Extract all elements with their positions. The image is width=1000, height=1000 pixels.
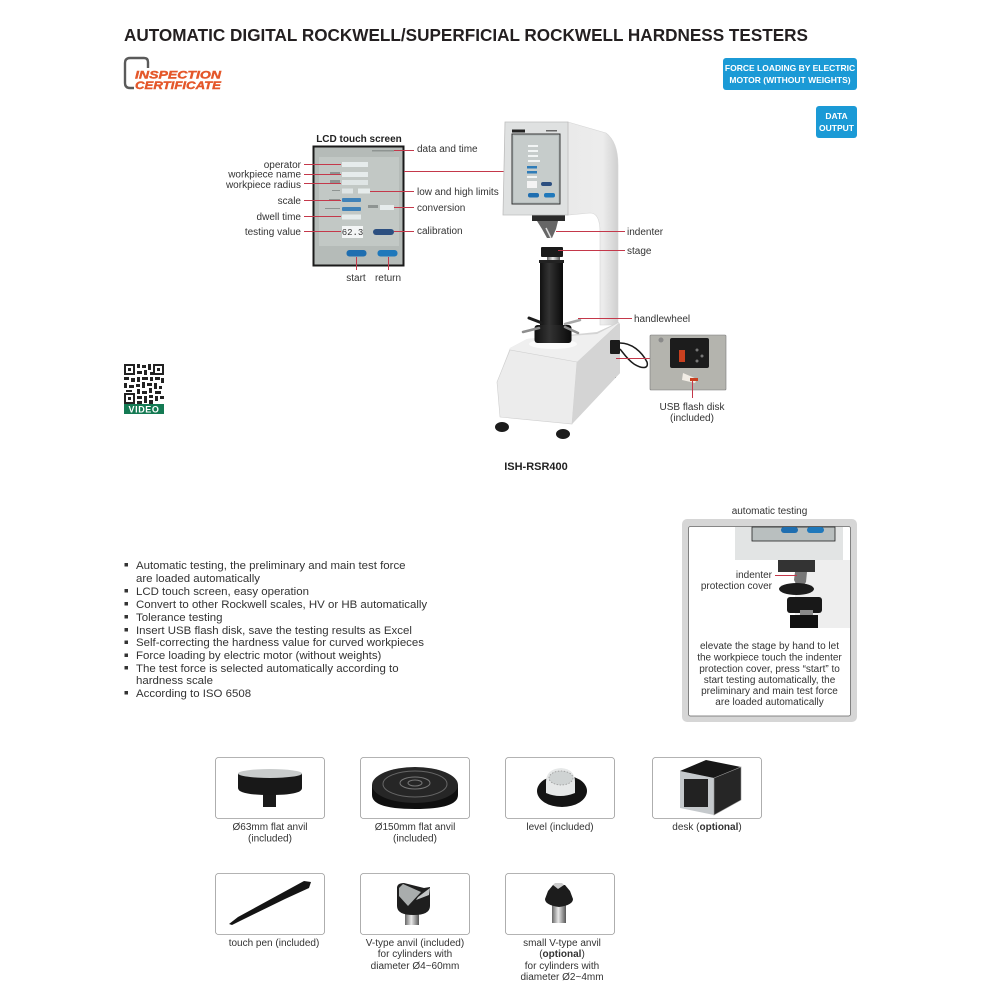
callouts: LCD labels left [225, 160, 341, 238]
callouts: LCD labels left: testing value [245, 227, 301, 238]
feature list: LCD touch screen, easy operation [136, 586, 309, 598]
callouts: LCD labels right: data and time [417, 144, 478, 155]
callout: indenter protection cover: protection cover [701, 581, 773, 592]
accessory: desk [652, 758, 762, 833]
badge: data output [816, 106, 857, 138]
feature list [124, 560, 427, 700]
machine: hardness tester [495, 122, 647, 439]
icon: pen [229, 881, 311, 925]
callouts: LCD labels left: workpiece name [227, 170, 301, 180]
accessory: 150mm flat anvil: (included) [393, 834, 437, 844]
callouts: machine parts: handlewheel [634, 314, 690, 325]
feature list: Self-correcting the hardness value for curved workpieces [136, 637, 424, 649]
accessory: small V-type anvil: diameter Ø2~4mm [520, 972, 604, 983]
inset: USB flash disk [650, 335, 726, 398]
callout: indenter protection cover [701, 570, 797, 592]
accessory: 63mm flat anvil: (included) [248, 834, 292, 844]
text: procedure: are loaded automatically [715, 697, 824, 708]
text: procedure: elevate the stage by hand to let [700, 641, 839, 652]
badge: data output: OUTPUT [819, 123, 855, 133]
feature list: Insert USB flash disk, save the testing results as Excel [136, 625, 412, 637]
badge: force loading: FORCE LOADING BY ELECTRIC [725, 63, 855, 73]
accessory: V-type anvil: for cylinders with [378, 949, 452, 960]
accessory: small V-type anvil [506, 874, 614, 983]
accessory: 150mm flat anvil: Ø150mm flat anvil [375, 822, 455, 833]
panel: automatic testing [682, 506, 857, 722]
photo: indenter detail [735, 527, 850, 628]
base [497, 322, 620, 424]
text: procedure: preliminary and main test force [701, 686, 838, 697]
handlewheel [523, 318, 580, 333]
accessory: level: level (included) [526, 822, 594, 833]
callouts: start and return [346, 257, 401, 284]
callouts: machine parts: indenter [627, 227, 664, 238]
icon: level [537, 768, 587, 807]
callouts: LCD labels left: scale [278, 196, 301, 207]
feature list: are loaded automatically [136, 573, 260, 585]
head panel [503, 122, 568, 215]
accessory: 63mm flat anvil: Ø63mm flat anvil [232, 822, 308, 833]
callouts: start and return: return [375, 273, 401, 284]
heading: LCD touch screen: LCD touch screen [316, 134, 402, 145]
callouts: LCD labels right: calibration [417, 226, 463, 237]
badge: force loading: MOTOR (WITHOUT WEIGHTS) [729, 75, 851, 85]
column body [568, 122, 618, 325]
feature list: Tolerance testing [136, 612, 222, 624]
callouts: LCD labels right: conversion [417, 203, 465, 214]
accessory: level [506, 758, 614, 833]
icon: V anvil [397, 883, 430, 925]
accessory: small V-type anvil: small V-type anvil [523, 938, 601, 949]
accessory: V-type anvil [360, 874, 470, 972]
accessory: desk: desk (optional) [672, 822, 742, 833]
icon: inspection certificate logo: INSPECTION [135, 70, 222, 82]
screen frame [314, 146, 404, 266]
column shaft [534, 255, 572, 343]
callouts: LCD labels right: low and high limits [417, 187, 499, 198]
model name: ISH-RSR400 [504, 461, 568, 473]
panel frame [682, 519, 857, 722]
callouts: machine parts: stage [627, 246, 652, 257]
callouts: LCD labels right [370, 144, 516, 237]
feature list: Convert to other Rockwell scales, HV or HB automatically [136, 599, 427, 611]
feature list: hardness scale [136, 675, 213, 687]
feature list: Force loading by electric motor (without weights) [136, 650, 382, 662]
feet [495, 372, 616, 439]
feature list: According to ISO 6508 [136, 688, 251, 700]
accessory: touch pen: touch pen (included) [229, 938, 319, 949]
callouts: LCD labels left: workpiece radius [225, 180, 301, 191]
callouts: machine parts [556, 227, 690, 358]
text: procedure: start testing automatically, the [704, 675, 836, 686]
indenter [532, 215, 565, 238]
caption: USB flash disk [659, 402, 726, 424]
panel: LCD touch screen [314, 134, 404, 266]
accessory: small V-type anvil: (optional) [539, 949, 585, 960]
accessory: small V-type anvil: for cylinders with [525, 961, 599, 972]
accessory: 150mm flat anvil [360, 758, 470, 844]
icon: inspection certificate logo: CERTIFICATE [135, 80, 222, 92]
accessory: V-type anvil: V-type anvil (included) [366, 938, 464, 949]
feature list: The test force is selected automatically according to [136, 663, 399, 675]
icon: QR code video: VIDEO [128, 404, 160, 414]
power cable [610, 340, 647, 368]
accessory: V-type anvil: diameter Ø4~60mm [371, 961, 459, 972]
icon: QR code video [124, 364, 164, 414]
callout: indenter protection cover: indenter [736, 570, 773, 581]
icon: round anvil [372, 767, 458, 809]
icon: inspection certificate logo [125, 58, 222, 92]
heading: automatic testing: automatic testing [732, 506, 807, 517]
icon: flat anvil [238, 769, 302, 807]
callouts: start and return: start [346, 273, 366, 284]
testing value: 62.3 [342, 228, 363, 238]
accessory: 63mm flat anvil [216, 758, 324, 844]
accessory: touch pen [216, 874, 324, 949]
text: procedure: protection cover, press “start” to [699, 664, 840, 675]
text: procedure: the workpiece touch the indenter [697, 652, 842, 664]
badge: force loading [723, 58, 857, 90]
badge: data output: DATA [825, 111, 848, 121]
text: procedure [697, 641, 842, 708]
feature list: Automatic testing, the preliminary and main test force [136, 560, 406, 572]
caption: USB flash disk: USB flash disk [659, 402, 726, 413]
callouts: LCD labels left: operator [264, 160, 302, 171]
callouts: LCD labels left: dwell time [257, 212, 301, 223]
caption: USB flash disk: (included) [670, 413, 714, 424]
icon: small V anvil [545, 883, 573, 923]
stage [541, 247, 563, 257]
title: AUTOMATIC DIGITAL ROCKWELL/SUPERFICIAL ROCKWELL HARDNESS TESTERS [124, 25, 808, 45]
icon: case [680, 760, 741, 815]
